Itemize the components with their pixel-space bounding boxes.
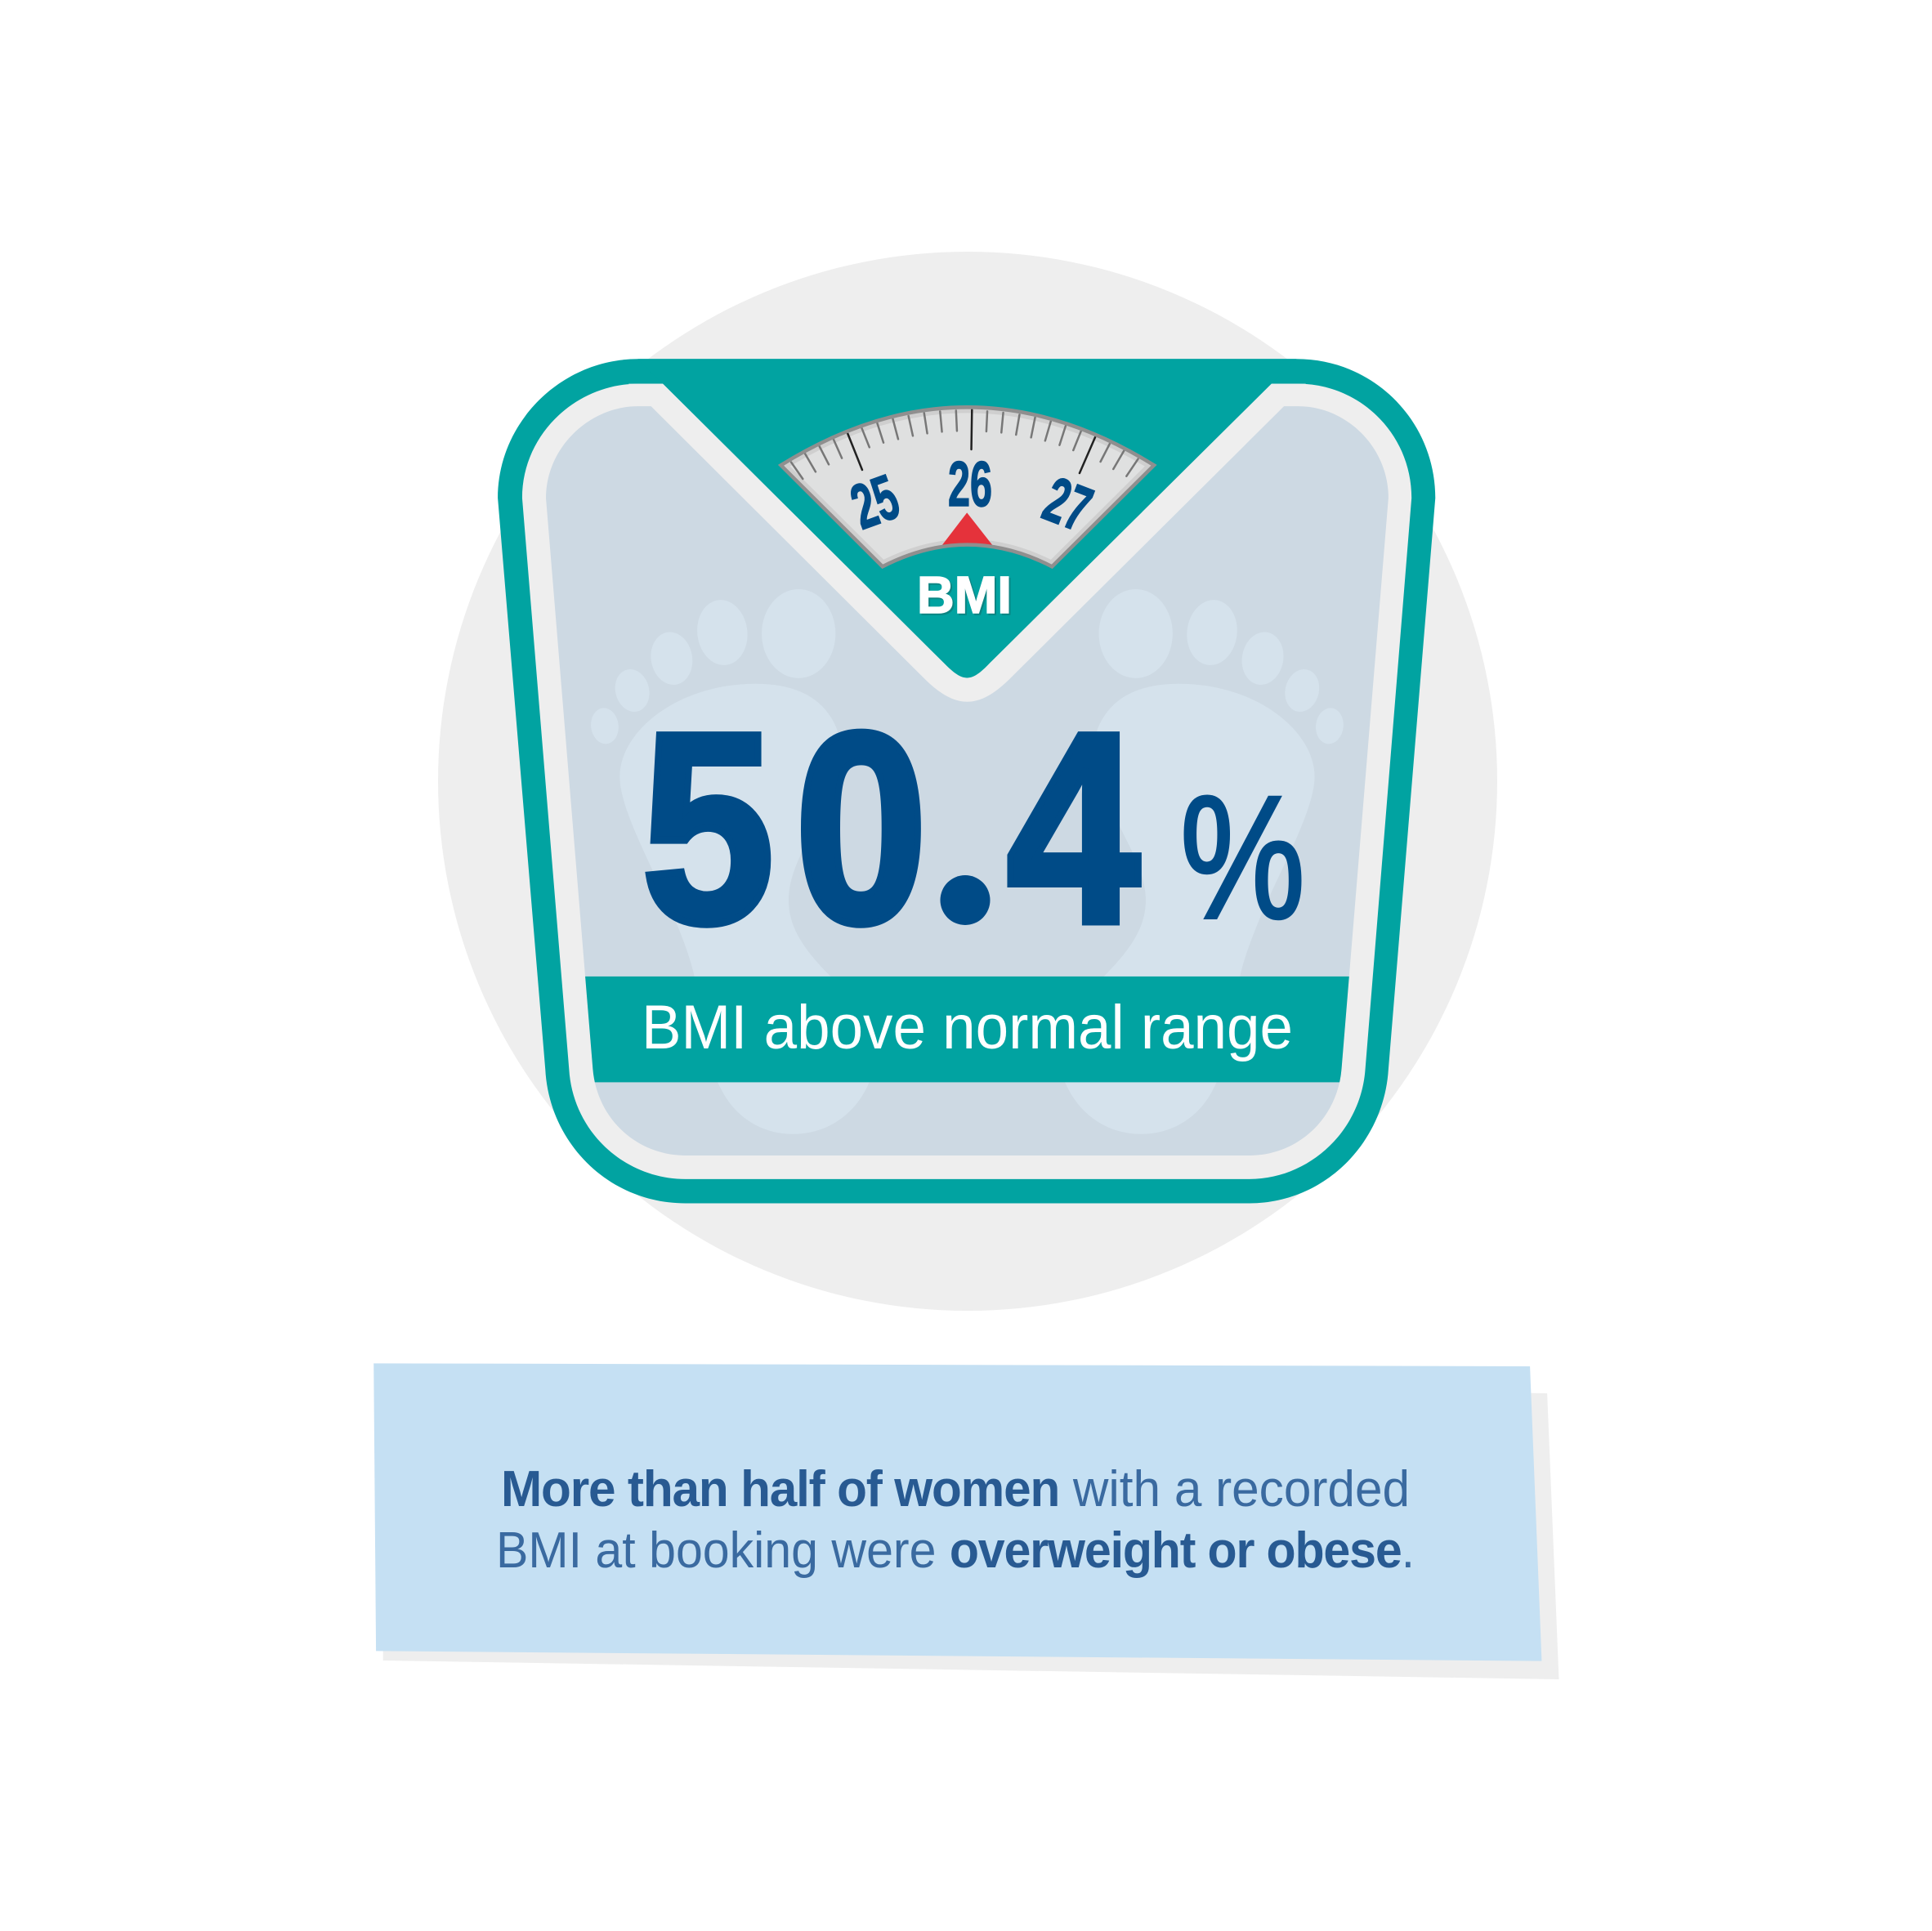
dial rim: [780, 407, 1154, 566]
dial gauge: [780, 407, 1154, 566]
percent sign: %: [1180, 760, 1305, 955]
big statistic 50.4: [642, 677, 1141, 980]
teal dial housing: [638, 359, 1296, 677]
icon: left footprint: [589, 589, 870, 1134]
red pointer triangle: [942, 512, 993, 545]
grey V border: [628, 384, 1306, 702]
big statistic 50.4: .: [941, 747, 987, 957]
big statistic 50.4: 4: [1007, 677, 1141, 980]
dial face: [780, 407, 1154, 566]
dial major ticks: [847, 410, 1095, 473]
dial number 25: 25: [842, 460, 908, 543]
dial inner shading: [780, 407, 1154, 566]
BMI dial label: BMI: [917, 565, 1012, 624]
note text line 1: More than half of women with a recorded: [501, 1461, 1410, 1518]
scale grey rim: [522, 384, 1411, 1179]
dial number 27: 27: [1035, 463, 1102, 546]
note card: [373, 1363, 1559, 1679]
scale standing panel: [546, 406, 1389, 1155]
scale outer teal body: [498, 359, 1435, 1203]
icon: right footprint: [1064, 589, 1345, 1134]
card shadow: [383, 1375, 1559, 1679]
background circle: [438, 252, 1497, 1311]
bathroom scale: [498, 359, 1435, 1203]
card face: [373, 1363, 1541, 1661]
dial minor ticks: [791, 410, 1138, 479]
note text line 2: BMI at booking were overweight or obese.: [496, 1522, 1415, 1579]
band label: BMI above normal range: [642, 993, 1293, 1062]
big statistic 50.4: 0: [794, 677, 928, 980]
dial number 26: 26: [948, 448, 992, 520]
big statistic 50.4: 5: [642, 677, 774, 980]
teal label band: [585, 976, 1349, 1082]
